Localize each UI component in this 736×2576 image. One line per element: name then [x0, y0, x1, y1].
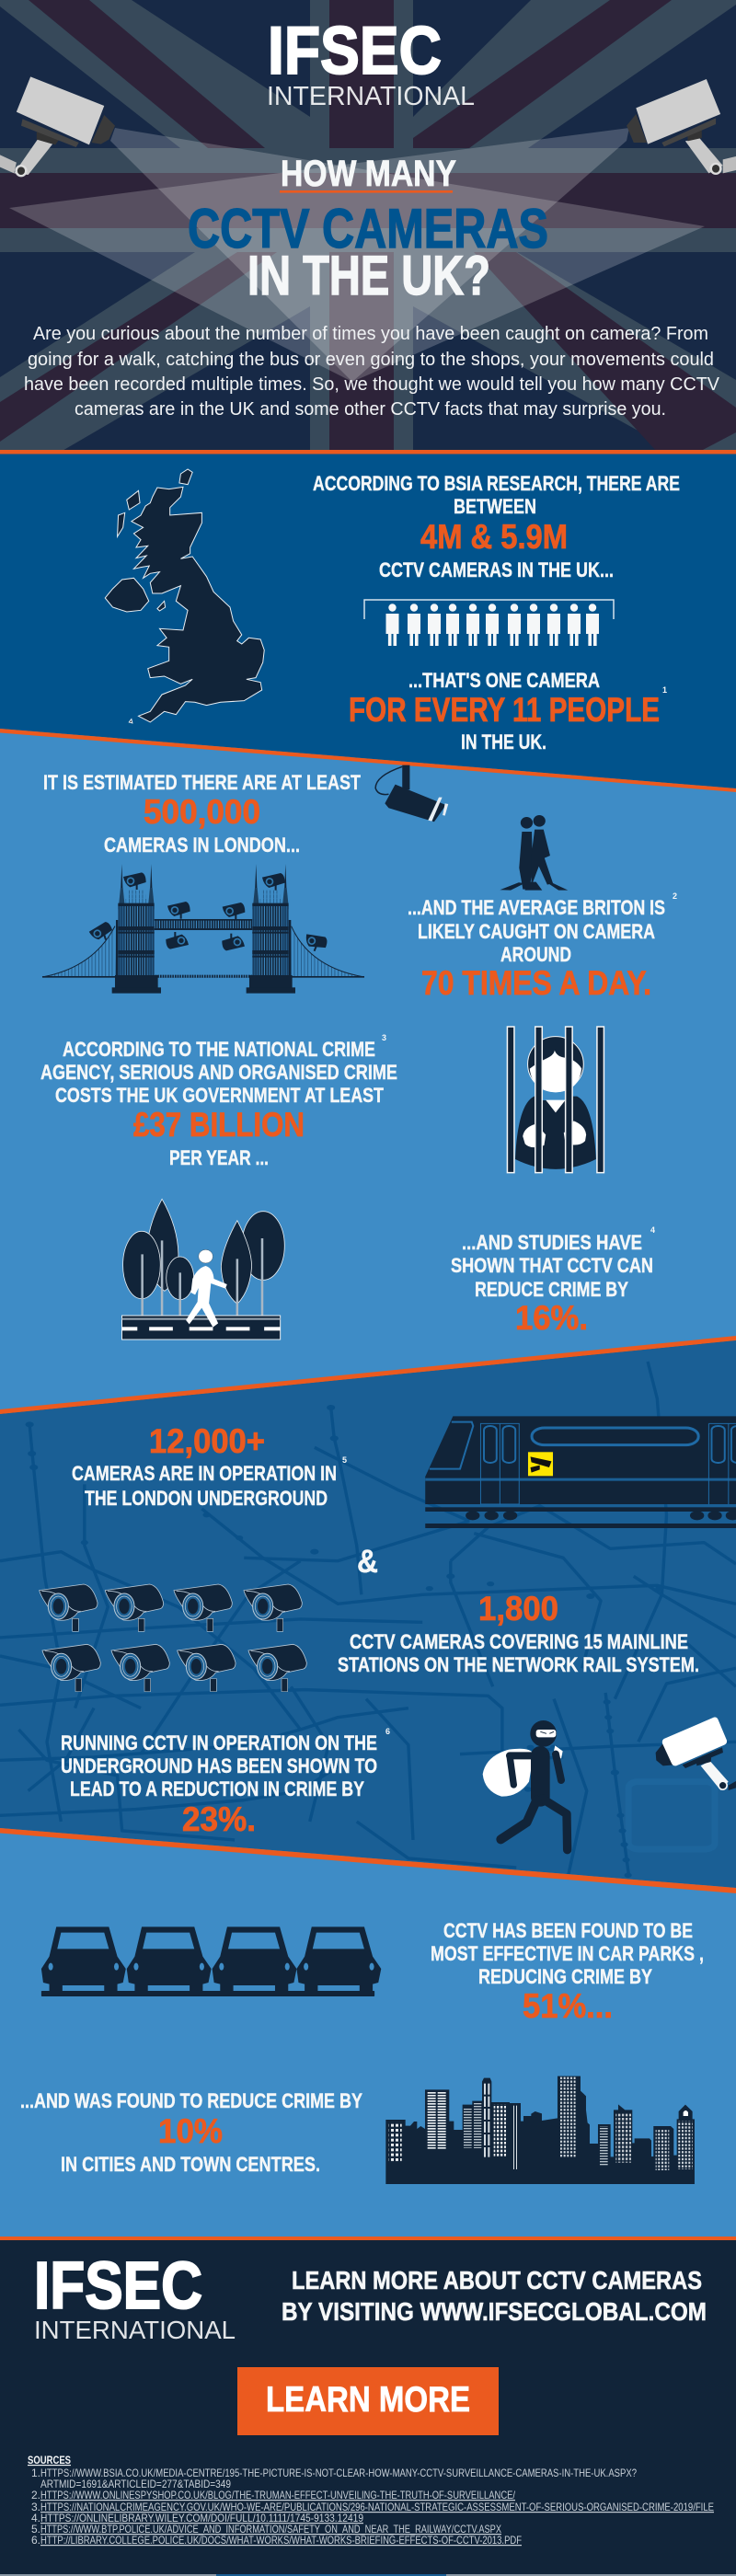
stat: studies show 16% reduction: REDUCE CRIME BY [475, 1278, 628, 1301]
panel: footer [0, 2237, 736, 2576]
stat: cameras on the London Underground: CAMERAS ARE IN OPERATION IN [72, 1462, 337, 1485]
sources list: 4. [31, 2512, 40, 2524]
sources list: HTTPS://WWW.ONLINESPYSHOP.CO.UK/BLOG/THE-TRUMAN-EFFECT-UNVEILING-THE-TRUTH-OF-SURVEILLANCE/ [40, 2489, 516, 2501]
stat: caught on camera 70 times a day: ...AND THE AVERAGE BRITON IS [408, 896, 665, 919]
stat: cities 10% [20, 2089, 362, 2176]
title: HOW MANY [281, 154, 456, 194]
stat: cameras on the London Underground: THE LONDON UNDERGROUND [85, 1487, 328, 1510]
button: learn more [237, 2367, 499, 2435]
stat: cost of organised crime: PER YEAR ... [169, 1146, 269, 1169]
stat: cost of organised crime: AGENCY, SERIOUS AND ORGANISED CRIME [40, 1061, 397, 1084]
sources list: HTTP://LIBRARY.COLLEGE.POLICE.UK/DOCS/WHAT-WORKS/WHAT-WORKS-BRIEFING-EFFECTS-OF-CCTV-2013.PDF [40, 2534, 522, 2547]
sources list: HTTPS://WWW.BTP.POLICE.UK/ADVICE_AND_INFORMATION/SAFETY_ON_AND_NEAR_THE_RAILWAY/CCTV.ASPX [40, 2523, 501, 2536]
ampersand: & [357, 1544, 378, 1580]
intro paragraph [24, 324, 720, 420]
sources list: ARTMID=1691&ARTICLEID=277&TABID=349 [40, 2478, 231, 2490]
panel: header with union jack [0, 0, 736, 452]
logo: footer IFSEC International: INTERNATIONAL [34, 2316, 236, 2344]
sources list: SOURCES [28, 2455, 71, 2467]
panel: BSIA research [0, 450, 736, 794]
stat: BSIA research text: 4M & 5.9M [420, 518, 568, 556]
sources list: HTTPS://ONLINELIBRARY.WILEY.COM/DOI/FULL/10.1111/1745-9133.12419 [40, 2512, 363, 2524]
stat: studies show 16% reduction: SHOWN THAT CCTV CAN [451, 1254, 653, 1277]
call to action text [282, 2266, 707, 2326]
stat: cameras in London: 500,000 [144, 793, 260, 831]
stat: BSIA research text: BETWEEN [454, 495, 536, 518]
intro paragraph: going for a walk, catching the bus or even going to the shops, your movements could [28, 350, 714, 370]
stat: studies show 16% reduction: 16%. [515, 1299, 588, 1337]
divider bands [0, 1336, 736, 1414]
icon: person walking past trees [121, 1199, 284, 1340]
stat: cities 10%: ...AND WAS FOUND TO REDUCE CRIME BY [20, 2089, 362, 2112]
icon: train with CCTV sign [425, 1416, 736, 1528]
stat: cost of organised crime: 3 [382, 1033, 386, 1042]
stat: cost of organised crime: COSTS THE UK GOVERNMENT AT LEAST [55, 1084, 384, 1107]
background: tube map lines [0, 1362, 736, 1878]
stat: cameras in London: CAMERAS IN LONDON... [104, 834, 300, 857]
stat: studies show 16% reduction: 4 [650, 1225, 655, 1235]
stat: studies show 16% reduction: ...AND STUDIES HAVE [462, 1231, 642, 1254]
icon: left security camera [0, 76, 115, 177]
stat: caught on camera 70 times a day: 2 [673, 891, 677, 901]
pictogram: eleven people under a bracket [364, 600, 614, 646]
sources list: 1. [31, 2467, 40, 2479]
sources list: 5. [31, 2523, 40, 2536]
stat: studies show 16% reduction [451, 1225, 655, 1337]
logo: footer IFSEC International: IFSEC [34, 2249, 202, 2323]
intro paragraph: Are you curious about the number of times you have been caught on camera? From [33, 324, 708, 344]
stat: cost of organised crime: ACCORDING TO THE NATIONAL CRIME [63, 1038, 375, 1061]
stat: mainline station cameras [338, 1590, 699, 1676]
stat: cost of organised crime [40, 1033, 397, 1169]
icon: city skyline [385, 2076, 695, 2184]
stat: car parks 51%: REDUCING CRIME BY [478, 1965, 652, 1988]
icon: Tower Bridge with cameras [42, 864, 364, 994]
stat: BSIA research text [313, 472, 680, 581]
icon: walking couple [500, 815, 568, 891]
icon: right security camera [627, 79, 736, 175]
stat: BSIA research text: CCTV CAMERAS IN THE UK... [379, 558, 614, 581]
stat: cameras in London [43, 771, 361, 857]
stat: cameras on the London Underground: 12,000+ [149, 1422, 265, 1460]
icon: hanging camera [375, 765, 448, 822]
stat: cameras on the London Underground: 5 [342, 1455, 347, 1465]
logo: IFSEC International: IFSEC [268, 14, 442, 88]
stat: cameras on the London Underground [72, 1422, 347, 1510]
stat: caught on camera 70 times a day: 70 TIMES A DAY. [421, 964, 651, 1002]
stat: mainline station cameras: 1,800 [478, 1590, 558, 1627]
stat: one camera for every 11 people: FOR EVERY 11 PEOPLE [349, 691, 660, 729]
icon: row of cars [41, 1926, 381, 1996]
stat: one camera for every 11 people [349, 669, 667, 753]
panel: car parks and city centres [0, 1828, 736, 2240]
stat: caught on camera 70 times a day [408, 891, 677, 1002]
panel: London and crime stats [0, 729, 736, 1414]
stat: one camera for every 11 people: 1 [662, 685, 667, 695]
title [188, 154, 548, 306]
stat: caught on camera 70 times a day: LIKELY CAUGHT ON CAMERA [418, 920, 655, 943]
icon: burglar running with sack [483, 1720, 568, 1850]
stat: car parks 51% [431, 1919, 704, 2025]
stat: car parks 51%: 51%... [523, 1987, 613, 2025]
stat: cities 10%: IN CITIES AND TOWN CENTRES. [61, 2153, 320, 2176]
stat: 23% reduction on the underground [61, 1727, 390, 1838]
logo: IFSEC International: INTERNATIONAL [267, 82, 475, 111]
stat: one camera for every 11 people: IN THE UK. [461, 730, 546, 753]
stat: caught on camera 70 times a day: AROUND [500, 943, 571, 966]
sources list: 6. [31, 2534, 40, 2547]
panel: London Underground [0, 1340, 736, 1892]
stat: 23% reduction on the underground: RUNNING CCTV IN OPERATION ON THE [61, 1731, 377, 1754]
intro paragraph: cameras are in the UK and some other CCTV facts that may surprise you. [75, 399, 666, 420]
stat: one camera for every 11 people: ...THAT'S ONE CAMERA [408, 669, 600, 692]
title: IN THE UK? [247, 245, 490, 306]
title: CCTV CAMERAS [188, 198, 548, 259]
stat: cost of organised crime: £37 BILLION [133, 1106, 305, 1144]
sources list: 2. [31, 2489, 40, 2501]
stat: 23% reduction on the underground: LEAD TO A REDUCTION IN CRIME BY [70, 1777, 364, 1800]
stat: cities 10%: 10% [158, 2112, 223, 2150]
sources list: 3. [31, 2501, 40, 2513]
stat: 23% reduction on the underground: UNDERGROUND HAS BEEN SHOWN TO [61, 1754, 377, 1777]
sources list [28, 2455, 714, 2547]
map of the UK [105, 469, 264, 723]
icon: white CCTV camera [656, 1718, 736, 1790]
stat: 23% reduction on the underground: 23%. [182, 1800, 256, 1838]
stat: cameras in London: IT IS ESTIMATED THERE ARE AT LEAST [43, 771, 361, 794]
button: learn more: LEARN MORE [266, 2380, 470, 2420]
stat: 23% reduction on the underground: 6 [385, 1727, 390, 1736]
icon group: eight CCTV cameras [40, 1584, 306, 1692]
intro paragraph: have been recorded multiple times. So, we thought we would tell you how many CCTV [24, 374, 720, 395]
icon: prisoner behind bars [507, 1027, 604, 1173]
